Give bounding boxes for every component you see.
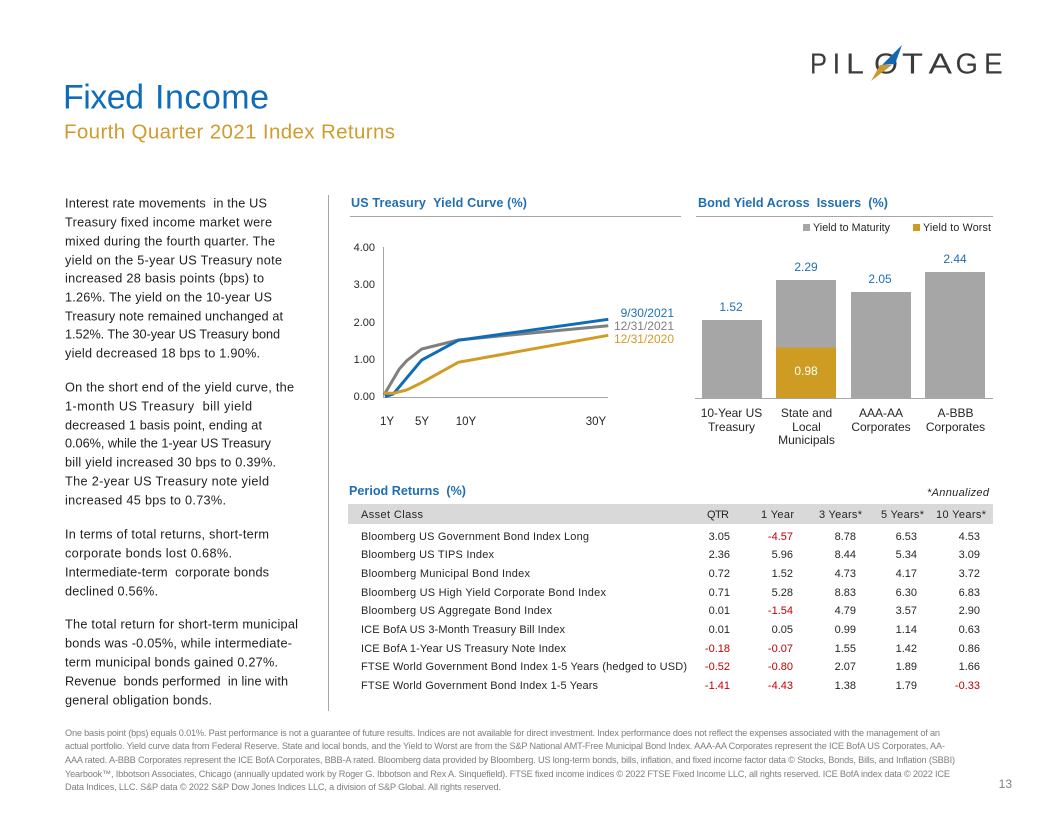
table: -0.18 (705, 643, 730, 655)
bar chart: 2.29 (794, 260, 818, 274)
table: Bloomberg US High Yield Corporate Bond Index (361, 587, 606, 599)
line chart: 12/31/2021 (614, 319, 674, 333)
annualized note: *Annualized (927, 487, 990, 499)
table: -0.52 (705, 661, 730, 673)
table: FTSE World Government Bond Index 1-5 Years (hedged to USD) (361, 661, 687, 673)
table: 0.01 (709, 605, 730, 617)
commentary text block: corporate bonds lost 0.68%. (65, 547, 232, 561)
line chart: 4.00 (354, 242, 375, 254)
table: 0.72 (709, 568, 730, 580)
legend: Yield to Maturity (813, 222, 891, 234)
legend: Yield to Worst (923, 222, 991, 234)
table: 0.05 (772, 624, 793, 636)
table: 10 Years* (936, 509, 987, 521)
table: 5.34 (896, 549, 917, 561)
footnote disclosures: One basis point (bps) equals 0.01%. Past performance is not a guarantee of future results. Indices are not available for direct investment. Index performance does not reflect the expenses associated with the management of an (65, 728, 940, 738)
table: Bloomberg US Aggregate Bond Index (361, 605, 552, 617)
table: 3.57 (896, 605, 917, 617)
heading: US Treasury Yield Curve: US Treasury Yield Curve (%) (351, 196, 527, 210)
logo: Pilotage: I (832, 48, 840, 80)
commentary text block (65, 197, 298, 708)
table: ICE BofA US 3-Month Treasury Bill Index (361, 624, 566, 636)
table: Bloomberg Municipal Bond Index (361, 568, 530, 580)
table: -1.41 (705, 680, 730, 692)
commentary text block: increased 28 basis points (bps) to (65, 272, 264, 286)
footnote disclosures: Data Indices, LLC. S&P data © 2022 S&P Dow Jones Indices LLC, a division of S&P Global. All rights reserved. (65, 782, 501, 792)
commentary text block: Intermediate-term corporate bonds (65, 566, 269, 580)
commentary text block: 1-month US Treasury bill yield (65, 400, 252, 414)
line chart: 5Y (415, 416, 429, 428)
footnote disclosures: actual portfolio. Yield curve data from Federal Reserve. State and local bonds, and the Yield to Worst are from the S&P National AMT-Free Municipal Bond Index. AAA-AA Corporates represent the ICE BofA US Corporates, AA- (65, 741, 945, 751)
logo: Pilotage: E (984, 48, 1003, 80)
table: 2.07 (835, 661, 856, 673)
commentary text block: mixed during the fourth quarter. The (65, 235, 275, 249)
commentary text block: 1.26%. The yield on the 10-year US (65, 291, 272, 305)
table: 1.55 (835, 643, 856, 655)
panel: US Treasury yield curve (350, 196, 681, 428)
table: 0.71 (709, 587, 730, 599)
footnote disclosures: Yearbook™, Ibbotson Associates, Chicago (annually updated work by Roger G. Ibbotson and Rex A. Sinquefield). FTSE fixed income indices © 2022 FTSE Fixed Income LLC, all rights reserved. ICE BofA index data © 2022 ICE (65, 769, 950, 779)
commentary text block: The 2-year US Treasury note yield (65, 475, 269, 489)
line chart: 9/30/2021 (621, 306, 674, 320)
footnote disclosures (65, 728, 955, 792)
commentary text block: The total return for short-term municipal (65, 618, 298, 632)
bar chart: Local (792, 420, 821, 434)
panel: bond yield across issuers (695, 196, 993, 447)
table: Asset Class (361, 509, 424, 521)
table: -1.54 (768, 605, 793, 617)
line chart: 1Y (380, 416, 394, 428)
line chart: 3.00 (354, 279, 375, 291)
table: 1.66 (959, 661, 980, 673)
line chart: 10Y (456, 416, 477, 428)
commentary text block: Treasury fixed income market were (65, 216, 272, 230)
commentary text block: Treasury note remained unchanged at (65, 310, 283, 324)
commentary text block: bill yield increased 30 bps to 0.39%. (65, 456, 276, 470)
title: Fixed (63, 78, 144, 116)
footnote disclosures: AAA rated. A-BBB Corporates represent the ICE BofA Corporates, BBB-A rated. Bloomberg data provided by Bloomberg. US long-term bonds, bills, inflation, and fixed income factor data © Stocks, Bonds, Bills, and Inflation (SBBI) (65, 755, 955, 765)
bar chart: 10-Year US (701, 406, 762, 420)
commentary text block: 1.52%. The 30-year US Treasury bond (65, 328, 280, 342)
commentary text block: Interest rate movements in the US (65, 197, 267, 211)
table: 1.52 (772, 568, 793, 580)
table: 5 Years* (881, 509, 925, 521)
bar chart: A-BBB (937, 406, 974, 420)
bar chart: AAA-AA (859, 406, 903, 420)
line chart: 0.00 (354, 391, 375, 403)
title: Income (155, 78, 269, 116)
table: 2.90 (959, 605, 980, 617)
bar chart (695, 252, 993, 447)
logo: Pilotage: O (874, 48, 898, 80)
logo: Pilotage: G (956, 48, 978, 80)
line chart: 12/31/2020 (614, 332, 674, 346)
commentary text block: In terms of total returns, short-term (65, 528, 269, 542)
table: 1 Year (761, 509, 794, 521)
heading: Period Returns: Period Returns (%) (349, 484, 466, 498)
table: 6.30 (896, 587, 917, 599)
bar chart: 2.05 (868, 272, 892, 286)
commentary text block: term municipal bonds gained 0.27%. (65, 656, 278, 670)
table: -0.33 (955, 680, 980, 692)
table: -4.43 (768, 680, 793, 692)
subtitle: Fourth Quarter 2021 Index Returns (64, 120, 395, 144)
logo: Pilotage (810, 45, 1003, 81)
table: 3 Years* (819, 509, 863, 521)
table: 1.42 (896, 643, 917, 655)
bar chart: State and (781, 406, 832, 420)
table: 6.53 (896, 531, 917, 543)
table: Bloomberg US Government Bond Index Long (361, 531, 589, 543)
line chart (354, 242, 674, 428)
bar chart: Municipals (778, 433, 835, 447)
commentary text block: yield on the 5-year US Treasury note (65, 254, 282, 268)
table: 8.78 (835, 531, 856, 543)
table: 4.17 (896, 568, 917, 580)
table: 1.38 (835, 680, 856, 692)
table: 4.79 (835, 605, 856, 617)
table: 0.01 (709, 624, 730, 636)
table: 3.05 (709, 531, 730, 543)
table: 1.89 (896, 661, 917, 673)
table: FTSE World Government Bond Index 1-5 Years (361, 680, 598, 692)
bar chart: Corporates (851, 420, 911, 434)
table: 0.63 (959, 624, 980, 636)
table: 6.83 (959, 587, 980, 599)
line chart: 2.00 (354, 317, 375, 329)
table: Bloomberg US TIPS Index (361, 549, 494, 561)
table: -0.07 (768, 643, 793, 655)
commentary text block: Revenue bonds performed in line with (65, 675, 288, 689)
table: 8.44 (835, 549, 856, 561)
logo: Pilotage: A (928, 48, 953, 80)
heading: Bond Yield Across Issuers: Bond Yield Across Issuers (%) (698, 196, 888, 210)
page number: 13 (999, 777, 1012, 791)
table: -4.57 (768, 531, 793, 543)
logo: Pilotage: L (846, 48, 864, 80)
line chart: 30Y (586, 416, 607, 428)
bar chart: Corporates (926, 420, 985, 434)
commentary text block: bonds was -0.05%, while intermediate- (65, 637, 292, 651)
table: 5.28 (772, 587, 793, 599)
table: 4.53 (959, 531, 980, 543)
table: 5.96 (772, 549, 793, 561)
table: 3.09 (959, 549, 980, 561)
bar chart: 0.98 (794, 364, 818, 378)
table: -0.80 (768, 661, 793, 673)
table: 1.79 (896, 680, 917, 692)
commentary text block: declined 0.56%. (65, 585, 158, 599)
bar chart: 1.52 (719, 300, 743, 314)
table: ICE BofA 1-Year US Treasury Note Index (361, 643, 566, 655)
table: 4.73 (835, 568, 856, 580)
table: 8.83 (835, 587, 856, 599)
panel: period returns (348, 484, 993, 692)
table: 0.99 (835, 624, 856, 636)
commentary text block: On the short end of the yield curve, the (65, 381, 294, 395)
line chart: 1.00 (354, 354, 375, 366)
commentary text block: decreased 1 basis point, ending at (65, 419, 262, 433)
legend (803, 222, 991, 234)
commentary text block: yield decreased 18 bps to 1.90%. (65, 347, 260, 361)
commentary text block: general obligation bonds. (65, 694, 212, 708)
table: 2.36 (709, 549, 730, 561)
commentary text block: 0.06%, while the 1-year US Treasury (65, 437, 272, 451)
bar chart: 2.44 (943, 252, 967, 266)
logo: Pilotage: T (902, 48, 923, 80)
table: 3.72 (959, 568, 980, 580)
table (348, 504, 993, 692)
table: 0.86 (959, 643, 980, 655)
bar chart: Treasury (708, 420, 755, 434)
table: 1.14 (896, 624, 917, 636)
table: QTR (707, 509, 729, 521)
logo: Pilotage: P (810, 48, 827, 80)
commentary text block: increased 45 bps to 0.73%. (65, 494, 226, 508)
